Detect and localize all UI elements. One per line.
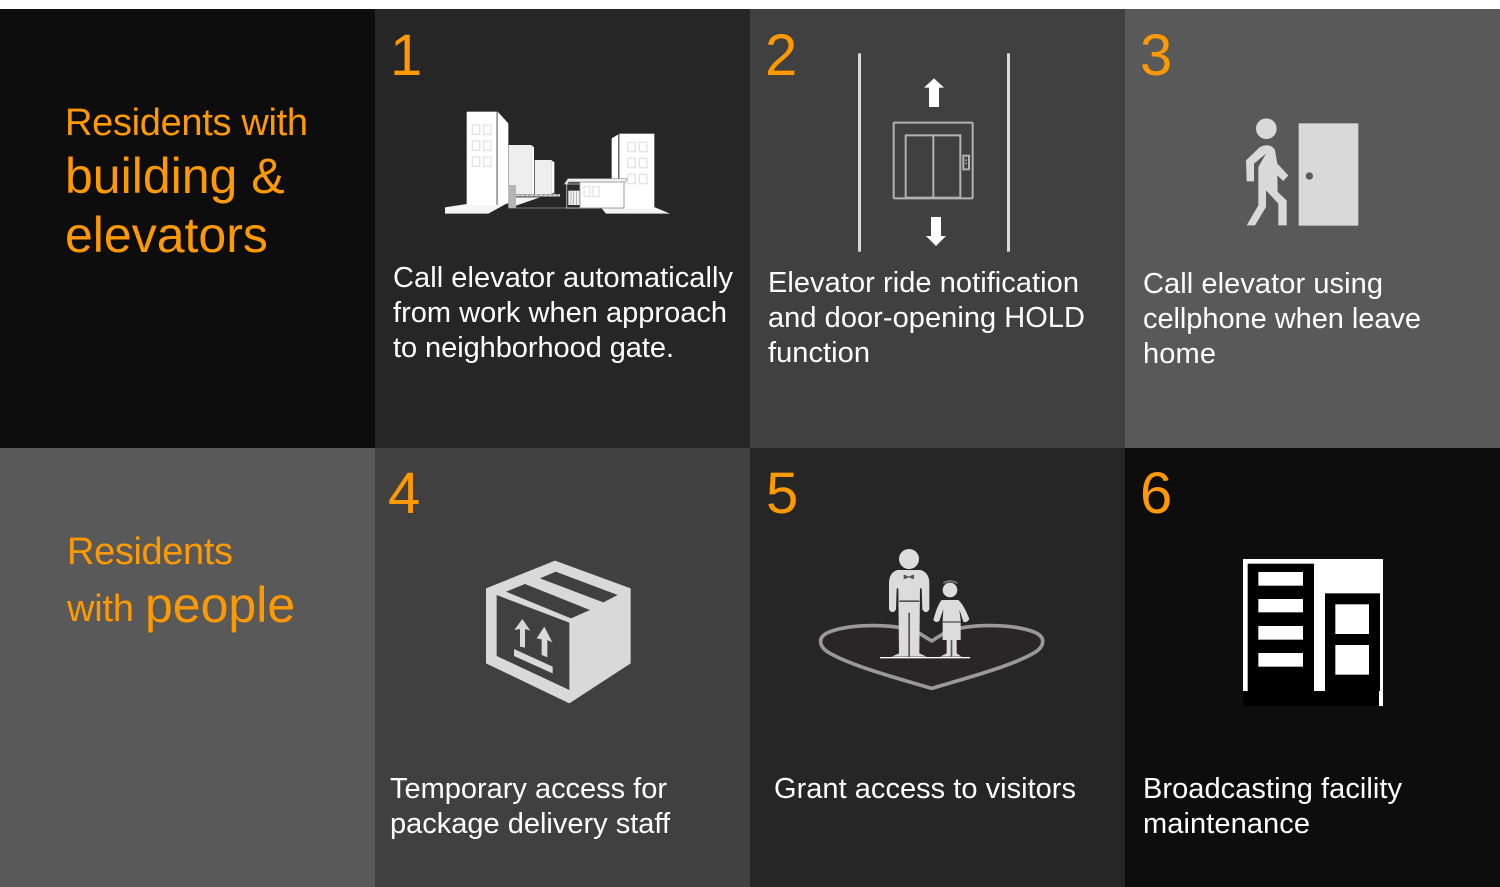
description: step 3: cellphone when leave [1143,303,1421,335]
description: step 6: maintenance [1143,808,1310,840]
panel: step 5 [750,448,1125,887]
panel: step 3 [1125,9,1500,448]
description: step 1: to neighborhood gate. [393,332,674,364]
description: step 2: and door-opening HOLD [768,302,1085,334]
heading: residents with building and elevators: Residents with [65,102,308,144]
description: step 1 [393,262,734,364]
heading: residents with people: with [66,588,134,630]
heading: residents with people: Residents [67,531,233,573]
number 4: 4 [388,461,420,526]
number 6: 6 [1140,461,1172,526]
number 1: 1 [390,23,422,88]
description: step 3: home [1143,338,1216,370]
number 5: 5 [766,461,798,526]
heading: residents with building and elevators [65,102,308,263]
panel: step 4 [375,448,750,887]
description: step 4: Temporary access for [390,773,667,805]
number 3: 3 [1140,23,1172,88]
description: step 1: from work when approach [393,297,727,329]
panel: step 1 [375,9,750,448]
description: step 6 [1143,773,1402,840]
icon: elevator with up and down arrows [858,53,1010,252]
description: step 3: Call elevator using [1143,268,1383,300]
icon: facility buildings [1243,559,1383,706]
icon: neighborhood buildings [445,112,670,214]
description: step 2 [768,267,1085,369]
icon: adult and child on heart [821,549,1043,688]
description: step 2: Elevator ride notification [768,267,1079,299]
heading: residents with building and elevators: elevators [65,207,268,263]
panel: residents with building and elevators [0,9,375,448]
heading: residents with people: people [145,577,295,633]
description: step 4: package delivery staff [390,808,671,840]
description: step 3 [1143,268,1421,370]
number 2: 2 [765,23,797,88]
heading: residents with building and elevators: building & [65,148,285,204]
icon: package box [486,561,631,703]
description: step 2: function [768,337,870,369]
description: step 4 [390,773,671,840]
panel: step 2 [750,9,1125,448]
panel: step 6 [1125,448,1500,887]
panel: residents with people [0,448,375,887]
description: step 6: Broadcasting facility [1143,773,1402,805]
icon: person walking to door [1246,118,1358,226]
heading: residents with people [66,531,295,633]
description: step 1: Call elevator automatically [393,262,734,294]
description: step 5: Grant access to visitors [774,773,1076,805]
